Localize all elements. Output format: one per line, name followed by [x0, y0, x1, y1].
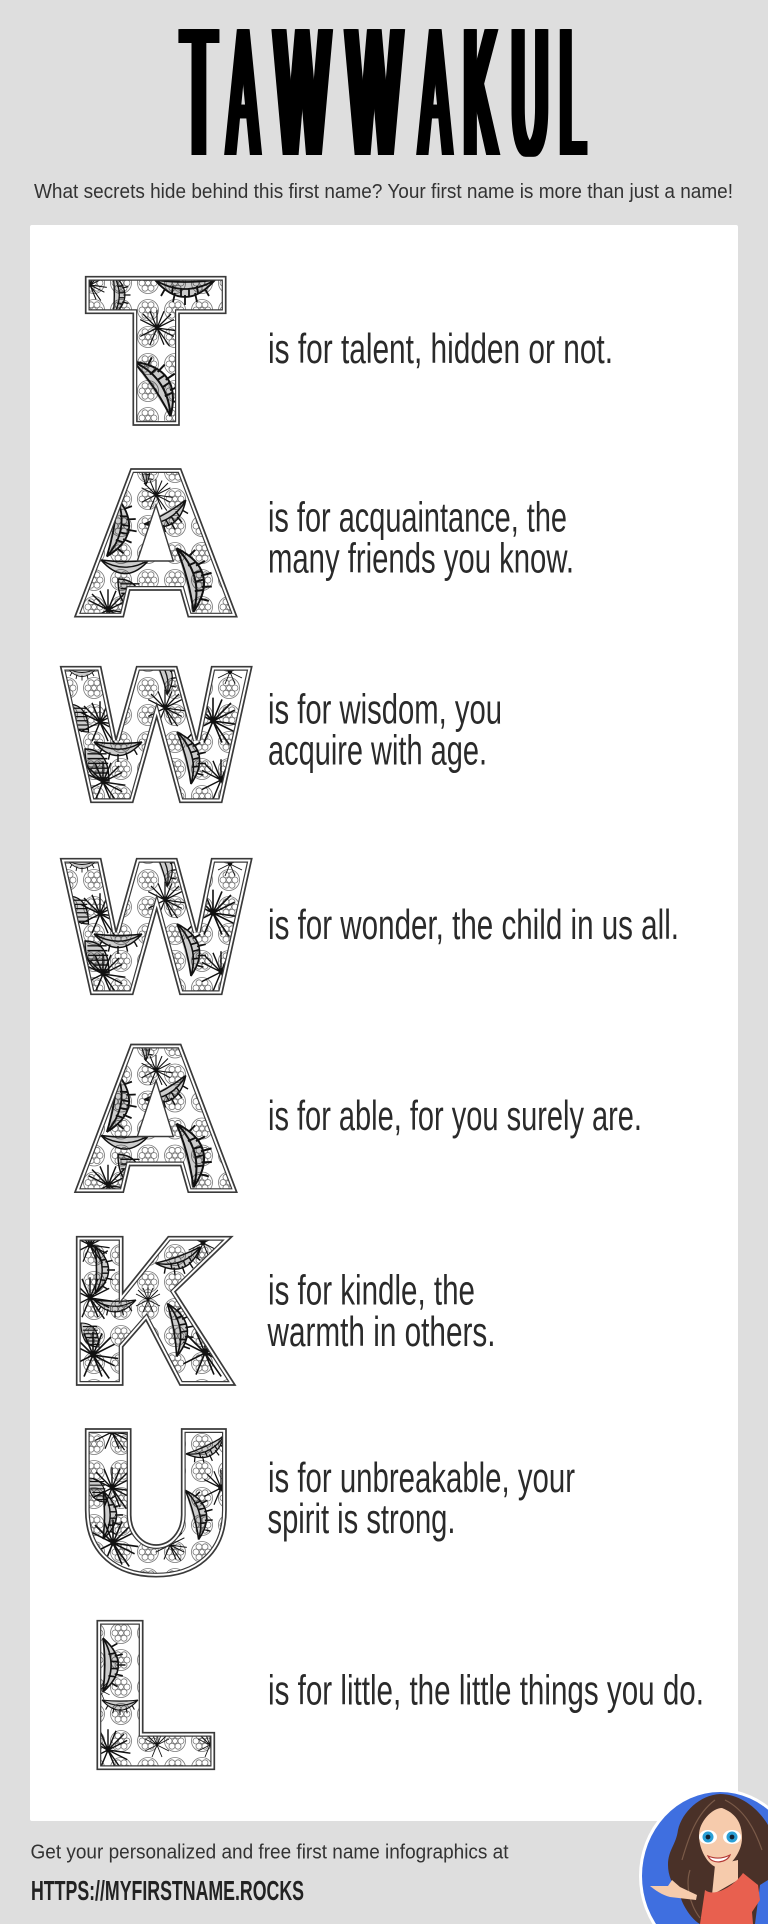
text: W meaning	[268, 685, 502, 773]
text: U meaning: spirit is strong.	[268, 1495, 456, 1542]
subtitle: What secrets hide behind this first name? Your first name is more than just a name!	[34, 181, 733, 203]
icon: decorated letter A	[74, 468, 238, 618]
panel: letters and meanings	[30, 225, 738, 1821]
row: letter A	[74, 468, 572, 618]
icon: decorated letter T	[76, 269, 226, 425]
row: second letter A	[74, 1044, 640, 1193]
icon: decorated letter W	[61, 649, 252, 803]
text: T meaning: is for talent, hidden or not.	[268, 325, 613, 372]
row: letter U	[86, 1414, 575, 1577]
icon: decorated letter A, second	[74, 1044, 238, 1193]
footer URL: HTTPS://MYFIRSTNAME.ROCKS	[31, 1875, 304, 1906]
text: U meaning: is for unbreakable, your	[268, 1454, 575, 1501]
row: letter L	[89, 1621, 704, 1771]
icon: decorated letter K	[71, 1227, 235, 1385]
row: second letter W	[60, 858, 676, 996]
text: A meaning: many friends you know.	[268, 535, 574, 582]
row: letter T	[76, 269, 613, 425]
text: K meaning	[267, 1266, 496, 1355]
text: U meaning	[268, 1454, 575, 1542]
text: K meaning: warmth in others.	[267, 1308, 496, 1355]
row: letter W	[60, 666, 500, 804]
text: W meaning: is for wisdom, you	[268, 685, 502, 732]
text: K meaning: is for kindle, the	[268, 1266, 475, 1314]
row: letter K	[71, 1227, 496, 1385]
text: A meaning: is for acquaintance, the	[268, 494, 567, 541]
text: A meaning	[268, 494, 574, 582]
icon: avatar woman in blue circle	[639, 1789, 768, 1924]
footer prompt text: Get your personalized and free first name infographics at	[30, 1842, 509, 1864]
icon: decorated letter U	[84, 1428, 227, 1578]
icon: decorated letter L	[89, 1621, 222, 1771]
title	[178, 0, 588, 165]
icon: decorated letter W, second	[61, 841, 252, 995]
text: W meaning: acquire with age.	[268, 726, 487, 773]
